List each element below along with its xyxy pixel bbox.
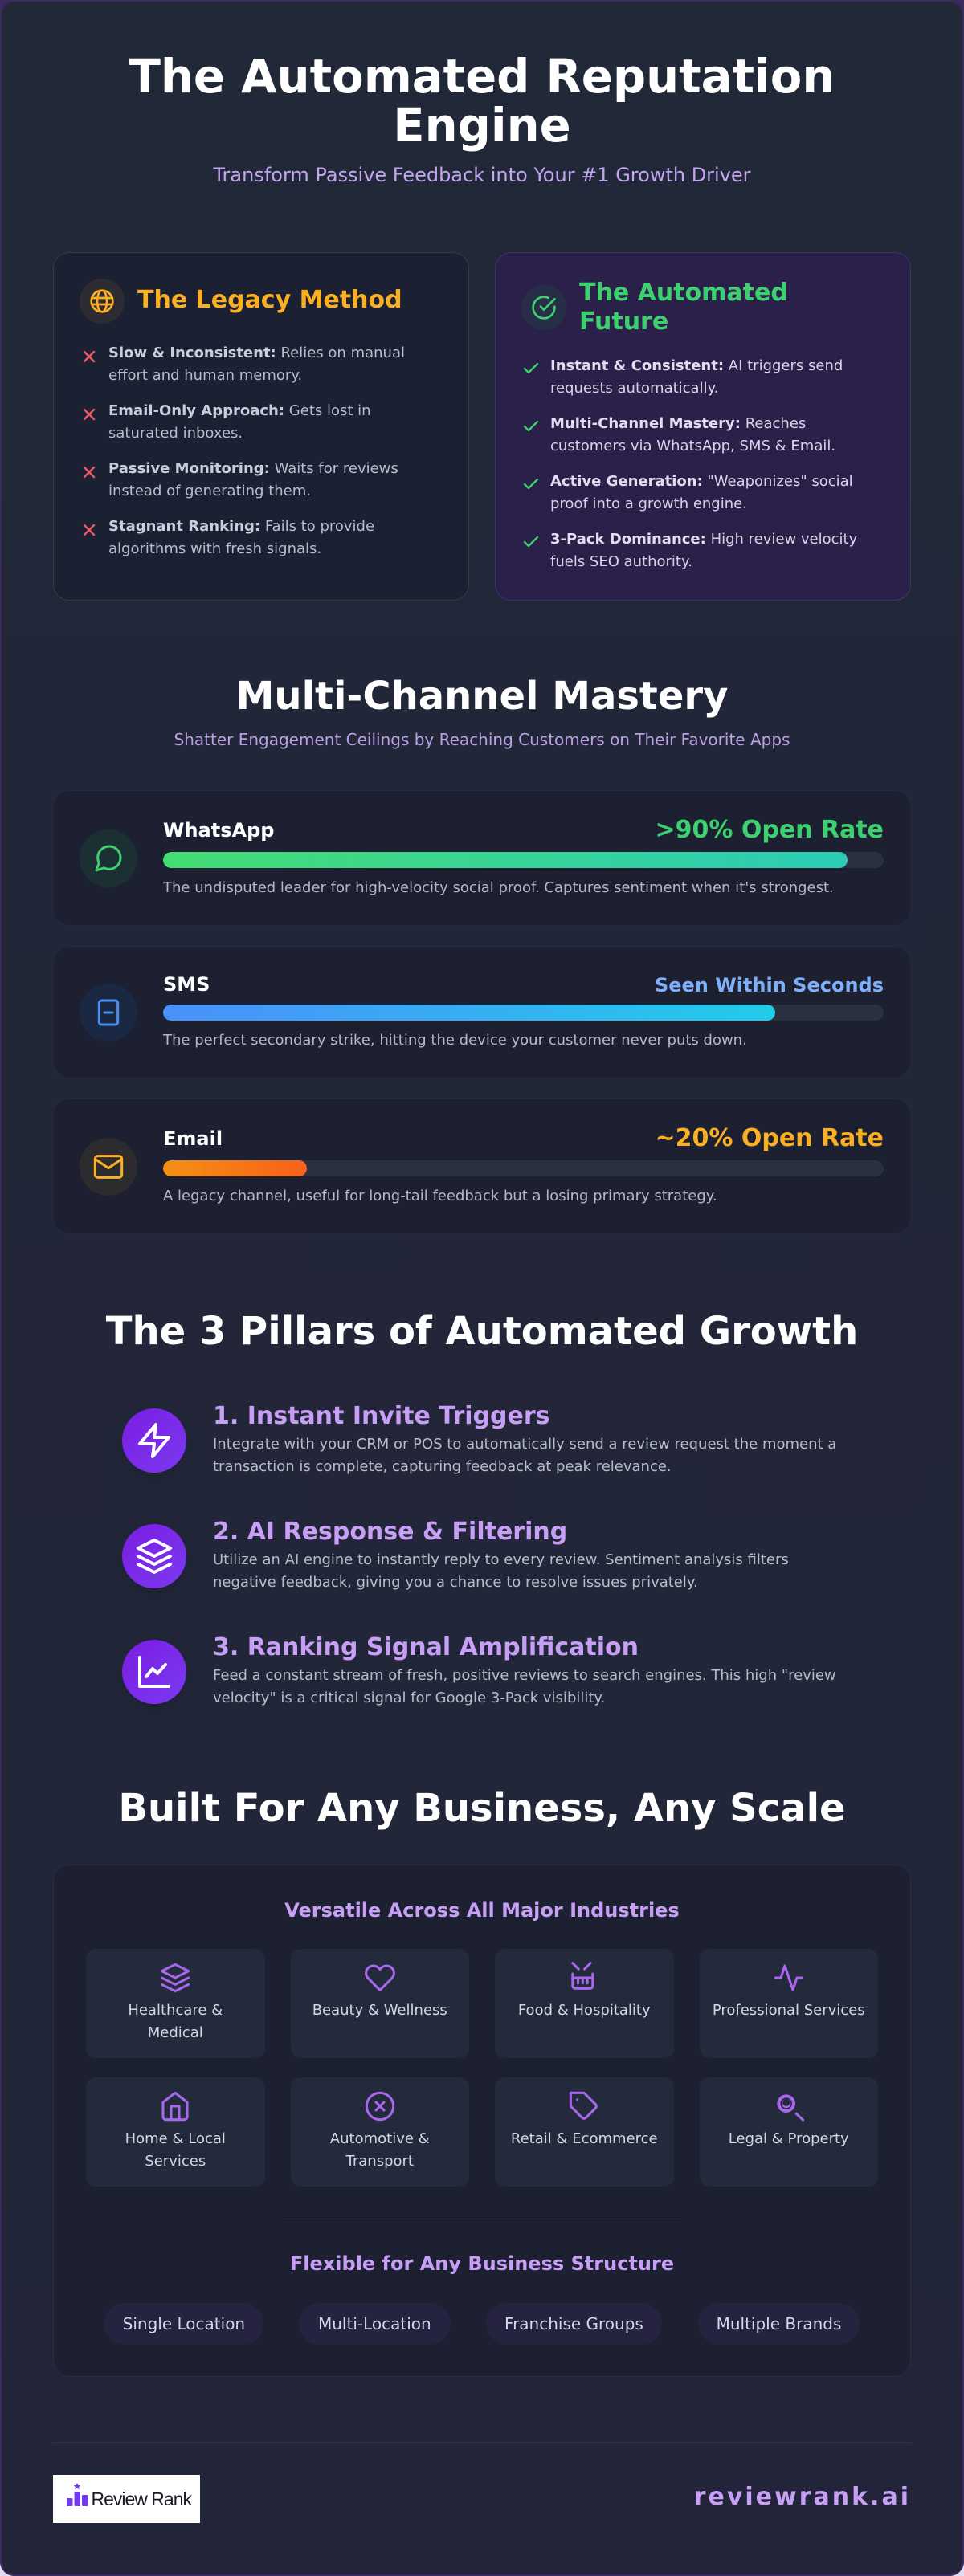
progress bar 20% bbox=[163, 1160, 884, 1176]
pillar title: 3. Ranking Signal Amplification bbox=[213, 1633, 639, 1661]
icon: check circle bbox=[521, 285, 566, 330]
subtitle: Transform Passive Feedback into Your #1 Growth Driver bbox=[213, 164, 751, 186]
tile: retail bbox=[495, 2077, 673, 2187]
tile: automotive: Transport bbox=[346, 2153, 414, 2170]
bullet: email-only approach bbox=[84, 402, 371, 442]
bullet: passive monitoring: Passive Monitoring: Waits for reviews bbox=[108, 460, 398, 477]
tile: home: Services bbox=[145, 2153, 206, 2170]
pillar description: velocity" is a critical signal for Google 3-Pack visibility. bbox=[213, 1689, 605, 1706]
bullet: active generation bbox=[524, 472, 853, 512]
bullet: stagnant ranking: algorithms with fresh signals. bbox=[108, 540, 321, 557]
bullet: instant and consistent bbox=[524, 357, 843, 397]
bullet: active generation: proof into a growth engine. bbox=[550, 495, 747, 512]
heading: the automated future: Future bbox=[579, 308, 668, 336]
tile: food: Food & Hospitality bbox=[518, 2002, 651, 2019]
progress bar 95% bbox=[163, 852, 884, 868]
bullet: slow and inconsistent: effort and human memory. bbox=[108, 367, 302, 384]
pillar description: Integrate with your CRM or POS to automatically send a review request the moment a bbox=[213, 1436, 836, 1453]
pill: multiple brands: Multiple Brands bbox=[717, 2314, 841, 2333]
icon: lightning bolt bbox=[122, 1408, 186, 1473]
bullet: instant and consistent: requests automatically. bbox=[550, 379, 718, 397]
bullet: slow and inconsistent bbox=[84, 344, 405, 384]
tile: legal bbox=[699, 2077, 878, 2187]
pill: franchise groups bbox=[486, 2303, 662, 2345]
bullet: 3-pack dominance: fuels SEO authority. bbox=[550, 552, 692, 570]
panel: email channel bbox=[53, 1098, 911, 1234]
bullet: multi-channel mastery: customers via WhatsApp, SMS & Email. bbox=[550, 437, 835, 454]
subheading: structures: Flexible for Any Business Structure bbox=[290, 2252, 674, 2275]
panel: the legacy method bbox=[53, 252, 469, 601]
website url: reviewrank.ai bbox=[694, 2483, 911, 2511]
channel name: Email bbox=[163, 1127, 223, 1150]
pillar description: Feed a constant stream of fresh, positive reviews to search engines. This high "review bbox=[213, 1667, 836, 1684]
heading: multi-channel mastery: Multi-Channel Mastery bbox=[236, 674, 728, 719]
heading: the automated future: The Automated bbox=[579, 279, 788, 307]
pillar 2 bbox=[122, 1518, 789, 1591]
icon: line chart bbox=[122, 1640, 186, 1704]
tile: food bbox=[495, 1949, 673, 2058]
pillar description bbox=[213, 1667, 836, 1706]
pill: multiple brands bbox=[698, 2303, 860, 2345]
tile: home: Home & Local bbox=[125, 2130, 226, 2147]
icon: chat bubble bbox=[80, 829, 137, 887]
icon: layers bbox=[122, 1524, 186, 1588]
pill: franchise groups: Franchise Groups bbox=[504, 2314, 643, 2333]
tile: professional: Professional Services bbox=[713, 2002, 865, 2019]
logo: review rank bbox=[53, 2475, 200, 2523]
channel description: The undisputed leader for high-velocity social proof. Captures sentiment when it's strongest. bbox=[163, 879, 834, 896]
bullet: slow and inconsistent: Slow & Inconsistent: Relies on manual bbox=[108, 344, 405, 361]
open rate stat: ~20% Open Rate bbox=[655, 1124, 884, 1152]
tile: beauty bbox=[291, 1949, 469, 2058]
bullet: 3-pack dominance bbox=[524, 530, 857, 570]
speed stat: Seen Within Seconds bbox=[655, 974, 884, 997]
pillar title: 2. AI Response & Filtering bbox=[213, 1518, 567, 1546]
bullet: email-only approach: saturated inboxes. bbox=[108, 425, 243, 442]
pillar title: 1. Instant Invite Triggers bbox=[213, 1402, 550, 1430]
pill: multi-location bbox=[299, 2303, 451, 2345]
tile: beauty: Beauty & Wellness bbox=[312, 2002, 447, 2019]
pill: single location bbox=[104, 2303, 263, 2345]
open rate stat: >90% Open Rate bbox=[655, 816, 884, 844]
title: The Automated Reputation bbox=[129, 50, 835, 104]
tile: healthcare: Healthcare & bbox=[128, 2002, 223, 2019]
bullet: instant and consistent: Instant & Consistent: AI triggers send bbox=[550, 357, 843, 374]
logo wordmark: Review Rank bbox=[92, 2488, 191, 2509]
panel: whatsapp channel bbox=[53, 790, 911, 926]
bullet: stagnant ranking bbox=[84, 518, 374, 557]
tile: healthcare bbox=[86, 1949, 265, 2058]
channel name: WhatsApp bbox=[163, 819, 274, 842]
section subtitle: Shatter Engagement Ceilings by Reaching Customers on Their Favorite Apps bbox=[174, 730, 790, 749]
panel: sms channel bbox=[53, 946, 911, 1078]
tile: professional bbox=[699, 1949, 878, 2058]
icon: phone bbox=[80, 984, 137, 1041]
channel description: A legacy channel, useful for long-tail feedback but a losing primary strategy. bbox=[163, 1188, 717, 1204]
pillar description: negative feedback, giving you a chance to resolve issues privately. bbox=[213, 1574, 698, 1591]
bullet: email-only approach: Email-Only Approach: Gets lost in bbox=[108, 402, 371, 419]
heading: the 3 pillars: The 3 Pillars of Automated Growth bbox=[106, 1309, 858, 1354]
icon: globe bbox=[80, 279, 125, 324]
pill: single location: Single Location bbox=[123, 2314, 245, 2333]
bullet: stagnant ranking: Stagnant Ranking: Fails to provide bbox=[108, 518, 374, 535]
title: Engine bbox=[393, 99, 571, 153]
bullet: active generation: Active Generation: "Weaponizes" social bbox=[550, 472, 853, 490]
panel: industries and structures bbox=[53, 1865, 911, 2377]
tile: legal: Legal & Property bbox=[729, 2130, 849, 2147]
tile: automotive: Automotive & bbox=[330, 2130, 430, 2147]
bullet: multi-channel mastery bbox=[524, 414, 835, 454]
heading: the automated future bbox=[579, 279, 788, 336]
heading: the legacy method: The Legacy Method bbox=[137, 286, 402, 314]
pillar description bbox=[213, 1551, 789, 1591]
bullet: passive monitoring: instead of generating them. bbox=[108, 483, 311, 499]
progress bar 85% bbox=[163, 1005, 884, 1021]
tile: home bbox=[86, 2077, 265, 2187]
channel description: The perfect secondary strike, hitting the device your customer never puts down. bbox=[163, 1032, 747, 1049]
icon: bars and star bbox=[67, 2483, 88, 2506]
tile: automotive bbox=[291, 2077, 469, 2187]
title bbox=[129, 50, 835, 153]
pill: multi-location: Multi-Location bbox=[318, 2314, 431, 2333]
pillar 1 bbox=[122, 1402, 836, 1475]
panel: the automated future bbox=[495, 252, 911, 601]
pillar description bbox=[213, 1436, 836, 1475]
tile: retail: Retail & Ecommerce bbox=[511, 2130, 658, 2147]
bullet: 3-pack dominance: 3-Pack Dominance: High review velocity bbox=[550, 530, 857, 548]
bullet: passive monitoring bbox=[84, 460, 398, 499]
bullet: multi-channel mastery: Multi-Channel Mastery: Reaches bbox=[550, 414, 806, 432]
channel name: SMS bbox=[163, 973, 210, 996]
tile: healthcare: Medical bbox=[148, 2024, 203, 2041]
pillar description: Utilize an AI engine to instantly reply to every review. Sentiment analysis filters bbox=[213, 1551, 789, 1568]
heading: built for any business: Built For Any Business, Any Scale bbox=[118, 1786, 846, 1831]
subheading: industries: Versatile Across All Major Industries bbox=[284, 1899, 680, 1922]
pillar description: transaction is complete, capturing feedback at peak relevance. bbox=[213, 1458, 672, 1475]
pillar 3 bbox=[122, 1633, 836, 1706]
icon: envelope bbox=[80, 1138, 137, 1196]
